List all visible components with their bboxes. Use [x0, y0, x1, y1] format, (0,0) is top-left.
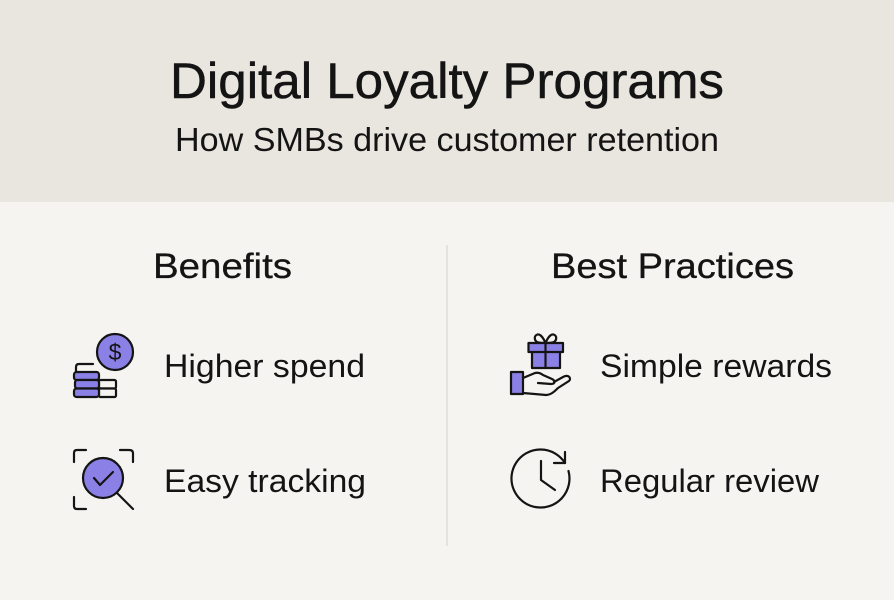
icon: magnifier check [74, 450, 133, 509]
label: regular review: Regular review [600, 463, 820, 499]
icon: gift in hand [511, 334, 570, 395]
label: simple rewards: Simple rewards [600, 348, 832, 384]
panel: benefits [74, 247, 366, 509]
icon: clock with arrow [511, 449, 569, 507]
heading: benefits: Benefits [153, 247, 292, 286]
header band [0, 0, 894, 202]
label: higher spend: Higher spend [164, 348, 365, 384]
subtitle: How SMBs drive customer retention [175, 121, 719, 158]
icon: coins and dollar: $ [109, 339, 122, 365]
panel: best practices [511, 247, 832, 507]
title: Digital Loyalty Programs [170, 53, 724, 109]
icon: coins and dollar [74, 334, 133, 397]
heading: best practices: Best Practices [551, 247, 794, 286]
label: easy tracking: Easy tracking [164, 463, 366, 499]
